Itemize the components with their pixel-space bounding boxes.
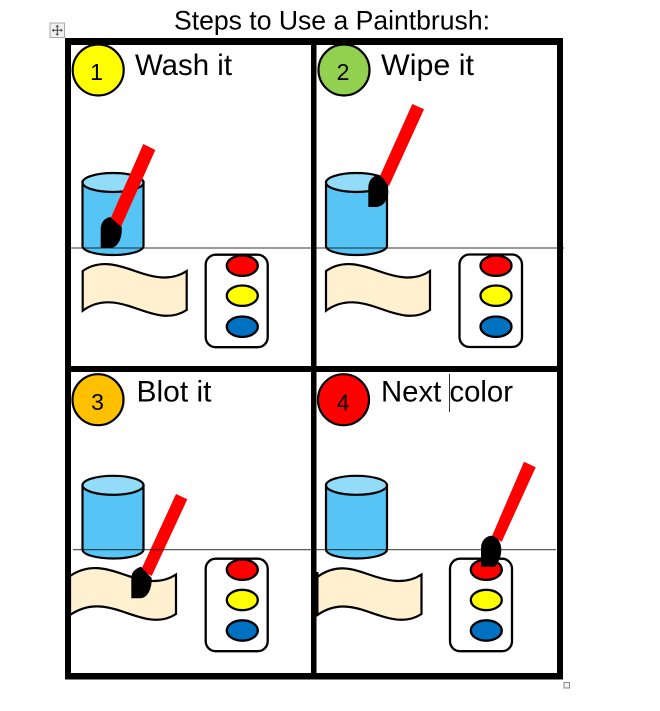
heading: Next color: Next color bbox=[381, 376, 513, 409]
icon: paint palette bbox=[206, 559, 268, 651]
icon: paint palette bbox=[206, 255, 268, 347]
text caret bbox=[449, 374, 450, 412]
heading: Wipe it: Wipe it bbox=[381, 49, 474, 82]
table grid bbox=[65, 38, 563, 680]
panel 1: wash it bbox=[73, 44, 268, 347]
panel 4: next color bbox=[316, 374, 536, 651]
step number 3 badge bbox=[72, 374, 124, 425]
icon: water cup bbox=[82, 173, 144, 255]
icon: water cup bbox=[82, 476, 144, 558]
step number 1 badge: 1 bbox=[90, 59, 103, 85]
step number 4 badge bbox=[318, 374, 369, 425]
icon: paintbrush on cup rim bbox=[368, 104, 424, 207]
table move handle icon bbox=[50, 23, 64, 38]
icon: paper towel bbox=[316, 568, 422, 620]
step number 4 badge: 4 bbox=[337, 390, 350, 416]
table resize handle icon bbox=[564, 682, 570, 688]
icon: paint palette bbox=[460, 254, 522, 347]
heading: Wash it: Wash it bbox=[135, 49, 232, 82]
icon: paint palette bbox=[450, 559, 512, 651]
icon: paper towel bbox=[326, 264, 430, 316]
horizon line: top row bbox=[71, 248, 564, 249]
panel 2: wipe it bbox=[318, 44, 522, 347]
panel 3: blot it bbox=[70, 374, 268, 651]
step number 1 badge bbox=[73, 44, 124, 96]
icon: paper towel bbox=[70, 568, 176, 620]
title: Steps to Use a Paintbrush: bbox=[174, 6, 490, 36]
step number 2 badge bbox=[318, 44, 370, 96]
icon: paintbrush on towel bbox=[131, 494, 187, 598]
horizon line: bottom row bbox=[73, 549, 556, 550]
icon: water cup bbox=[326, 173, 387, 255]
icon: paper towel bbox=[83, 264, 187, 316]
step number 2 badge: 2 bbox=[337, 59, 349, 85]
heading: Blot it: Blot it bbox=[136, 376, 212, 409]
icon: paintbrush on red paint bbox=[481, 462, 536, 567]
step number 3 badge: 3 bbox=[91, 389, 104, 415]
icon: water cup bbox=[326, 476, 387, 558]
icon: paintbrush in water bbox=[101, 144, 155, 248]
